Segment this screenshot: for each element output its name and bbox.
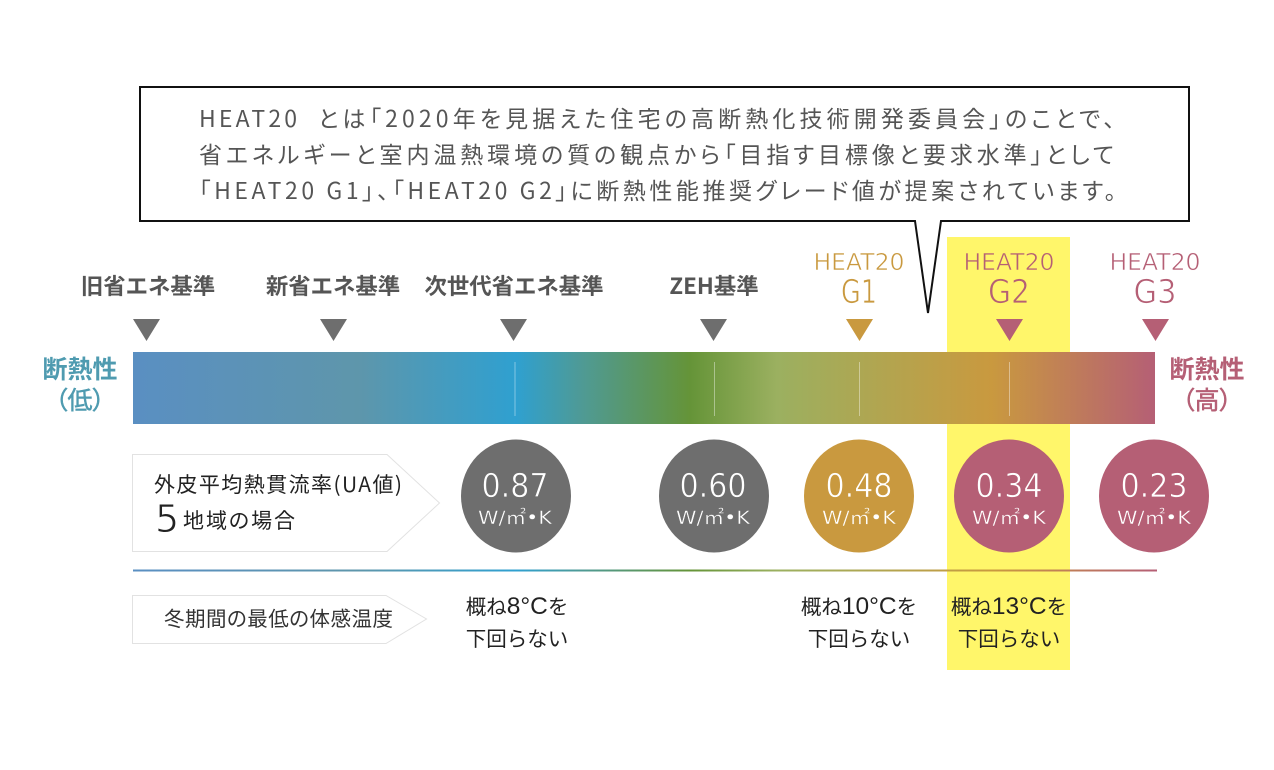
callout: HEAT20 explanation: [140, 87, 1189, 313]
value circle 0.87: 0.87: [482, 466, 548, 505]
value circle 0.48: 0.48: [826, 466, 892, 505]
row label: UA value: 地域の場合: [183, 505, 295, 535]
HEAT20 grade labels: G2: [988, 272, 1030, 311]
value circle 0.60: [659, 440, 769, 552]
marker triangles: [133, 319, 1169, 341]
callout: HEAT20 explanation: 省エネルギーと室内温熱環境の質の観点から「目指す目標像と要求水準」として: [199, 136, 1114, 170]
temperature note 8°C: [466, 590, 568, 652]
temperature note 10°C: 下回らない: [808, 622, 910, 652]
callout: HEAT20 explanation: 「HEAT20 G1」、「HEAT20 G2」に断熱性能推奨グレード値が提案されています。: [199, 172, 1116, 206]
value circle 0.48: W/㎡•K: [822, 506, 897, 529]
HEAT20 grade labels: G3: [1134, 272, 1176, 311]
value circle 0.60: 0.60: [680, 466, 746, 505]
value circle 0.23: W/㎡•K: [1117, 506, 1192, 529]
HEAT20 grade labels: G1: [841, 272, 877, 311]
temperature note 13°C: 下回らない: [958, 622, 1060, 652]
label: low insulation: （低）: [55, 381, 105, 417]
gradient insulation bar: [133, 352, 1155, 424]
HEAT20 grade labels: HEAT20: [814, 250, 904, 276]
value circle 0.48: [804, 440, 914, 552]
highlight column: HEAT20 G2: [947, 237, 1070, 670]
HEAT20 grade labels: [814, 250, 1200, 311]
callout: HEAT20 explanation: HEAT20: [199, 100, 297, 134]
gradient divider: [133, 570, 1157, 572]
temperature note 13°C: 概ね13°Cを: [951, 590, 1067, 620]
temperature note 13°C: [951, 590, 1067, 652]
row label: UA value: 外皮平均熱貫流率(UA値): [154, 469, 402, 499]
value circle 0.34: 0.34: [976, 466, 1042, 505]
value circle 0.34: [954, 440, 1064, 552]
label: high insulation: （高）: [1182, 381, 1232, 417]
temperature note 8°C: 概ね8°Cを: [466, 590, 568, 620]
label: high insulation: [1169, 350, 1245, 417]
value circle 0.23: 0.23: [1120, 466, 1188, 505]
standard labels: 次世代省エネ基準: [424, 269, 604, 301]
HEAT20 grade labels: HEAT20: [964, 250, 1054, 276]
temperature note 8°C: 下回らない: [466, 622, 568, 652]
row label: winter minimum temperature: 冬期間の最低の体感温度: [164, 602, 393, 632]
value circle 0.23: [1099, 440, 1209, 552]
row label: UA value: 5: [155, 497, 179, 541]
value circle 0.87: [461, 440, 571, 552]
temperature note 10°C: [801, 590, 917, 652]
temperature note 10°C: 概ね10°Cを: [801, 590, 917, 620]
label: low insulation: [42, 350, 118, 417]
value circle 0.34: W/㎡•K: [972, 506, 1047, 529]
label: high insulation: 断熱性: [1169, 350, 1245, 386]
HEAT20 grade labels: HEAT20: [1110, 250, 1200, 276]
value circle 0.87: W/㎡•K: [478, 506, 553, 529]
value circle 0.60: W/㎡•K: [676, 506, 751, 529]
row label: winter minimum temperature: [132, 596, 426, 644]
callout: HEAT20 explanation: とは「2020年を見据えた住宅の高断熱化技術開発委員会」のことで、: [318, 100, 1115, 134]
standard labels: 旧省エネ基準: [81, 269, 215, 301]
standard labels: ZEH基準: [669, 269, 759, 301]
row label: UA value: [132, 454, 440, 552]
standard labels: 新省エネ基準: [266, 269, 400, 301]
label: low insulation: 断熱性: [42, 350, 118, 386]
standard labels: [81, 269, 759, 301]
